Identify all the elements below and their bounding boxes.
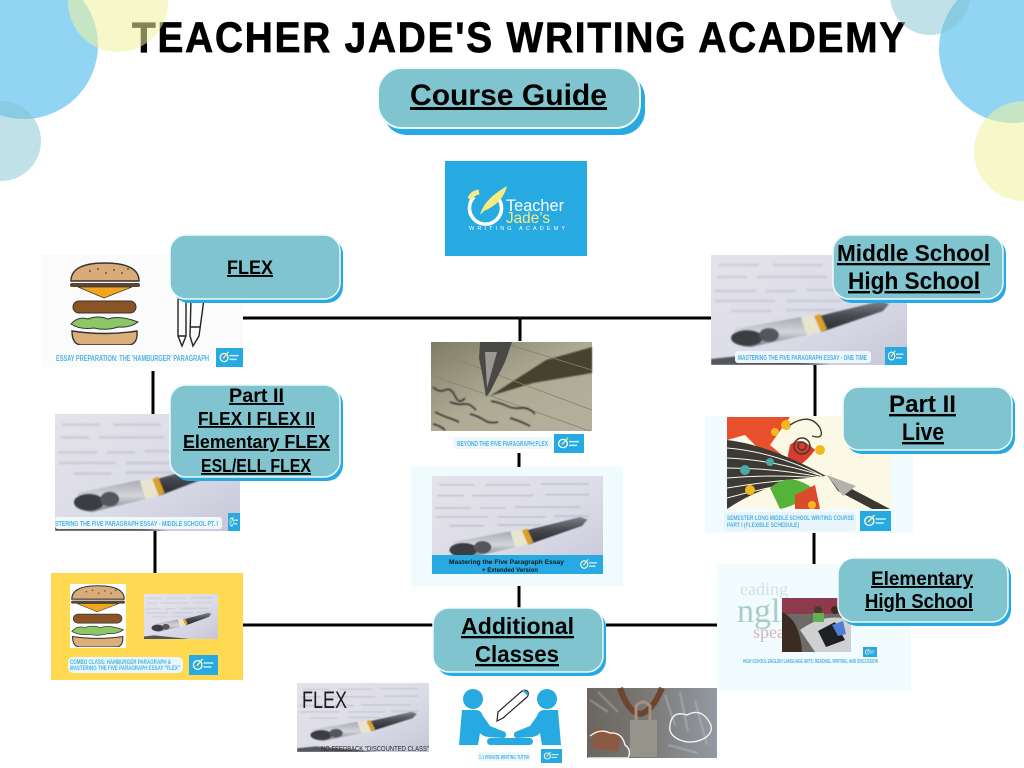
thumbnail: flex discounted class: FLEX bbox=[302, 687, 347, 714]
button: course guide bbox=[378, 68, 645, 135]
thumbnail: hamburger paragraph: ESSAY PREPARATION: THE 'HAMBURGER' PARAGRAPH bbox=[56, 354, 209, 363]
logo: Jade’s bbox=[506, 210, 550, 227]
thumbnail: mastering extended version: Mastering the Five Paragraph Essay bbox=[449, 559, 564, 566]
button: additional classes: Additional bbox=[461, 613, 574, 639]
thumbnail: mastering extended version bbox=[411, 467, 623, 586]
button: part II flex: Part II bbox=[229, 386, 284, 407]
thumbnail: five paragraph middle school bbox=[55, 414, 240, 531]
button: flex: FLEX bbox=[227, 258, 273, 279]
button: elementary high school: Elementary bbox=[871, 569, 973, 590]
thumbnail: combo class: COMBO CLASS: HAMBURGER PARAGRAPH & bbox=[70, 660, 171, 666]
thumbnail: high school ELA bbox=[717, 564, 911, 691]
button: part II live: Part II bbox=[889, 391, 956, 418]
button: course guide: Course Guide bbox=[410, 79, 607, 112]
thumbnail: combo class bbox=[51, 573, 243, 680]
thumbnail: semester long ink art bbox=[705, 416, 913, 533]
button: part II live: Live bbox=[902, 419, 944, 446]
button: elementary high school: High School bbox=[865, 591, 973, 613]
button: flex bbox=[170, 235, 343, 303]
thumbnail: beyond the five paragraph: BEYOND THE FIVE PARAGRAPH:FLEX bbox=[457, 439, 548, 448]
thumbnail: high school ELA: eading bbox=[740, 579, 788, 599]
thumbnail: high school ELA: HIGH SCHOOL ENGLISH LANGUAGE ARTS: READING, WRITING, AND DISCUSSION bbox=[743, 659, 878, 665]
connector lines bbox=[153, 318, 815, 625]
thumbnail: five paragraph one time: MASTERING THE FIVE PARAGRAPH ESSAY - ONE TIME bbox=[738, 355, 867, 362]
thumbnail: mastering extended version: + Extended Version bbox=[482, 567, 538, 574]
button: middle school high school: Middle School bbox=[837, 240, 990, 266]
button: part II flex: ESL/ELL FLEX bbox=[201, 456, 311, 476]
thumbnail: combo class: MASTERING THE FIVE PARAGRAPH ESSAY "FLEX" bbox=[70, 666, 180, 672]
button: middle school high school: High School bbox=[848, 268, 980, 295]
logo: Teacher bbox=[506, 196, 564, 215]
thumbnail: five paragraph middle school: STERING THE FIVE PARAGRAPH ESSAY - MIDDLE SCHOOL PT. I bbox=[55, 519, 218, 528]
icon: one-to-one tutoring: 1:1 PRIVATE WRITING TUTOR bbox=[479, 755, 529, 761]
decorative corner circles bbox=[0, 0, 1024, 201]
button: part II flex bbox=[170, 385, 343, 481]
thumbnail: five paragraph one time bbox=[711, 255, 907, 365]
thumbnail: flex discounted class bbox=[297, 683, 429, 753]
thumbnail: high school ELA: spea bbox=[753, 622, 785, 642]
logo: WRITING ACADEMY bbox=[469, 226, 565, 232]
button: part II flex: FLEX I FLEX II bbox=[198, 409, 315, 429]
thumbnail: locked door photo bbox=[587, 688, 717, 758]
button: elementary high school bbox=[838, 558, 1011, 626]
button: additional classes: Classes bbox=[475, 641, 559, 667]
thumbnail: hamburger paragraph bbox=[42, 254, 243, 367]
thumbnail: flex discounted class: NO FEEDBACK "DISCOUNTED CLASS" bbox=[321, 746, 429, 753]
thumbnail: semester long ink art: PART I (FLEXIBLE SCHEDULE) bbox=[727, 522, 799, 529]
button: additional classes bbox=[433, 608, 606, 676]
icon: one-to-one tutoring bbox=[459, 689, 562, 763]
title: TEACHER JADE'S WRITING ACADEMY bbox=[132, 14, 907, 62]
logo bbox=[445, 161, 587, 256]
button: part II flex: Elementary FLEX bbox=[183, 432, 330, 452]
thumbnail: semester long ink art: SEMESTER LONG MIDDLE SCHOOL WRITING COURSE bbox=[727, 515, 854, 522]
button: middle school high school bbox=[833, 235, 1006, 303]
thumbnail: beyond the five paragraph bbox=[431, 342, 592, 453]
thumbnail: high school ELA: ngli bbox=[737, 593, 790, 630]
button: part II live bbox=[843, 387, 1015, 454]
